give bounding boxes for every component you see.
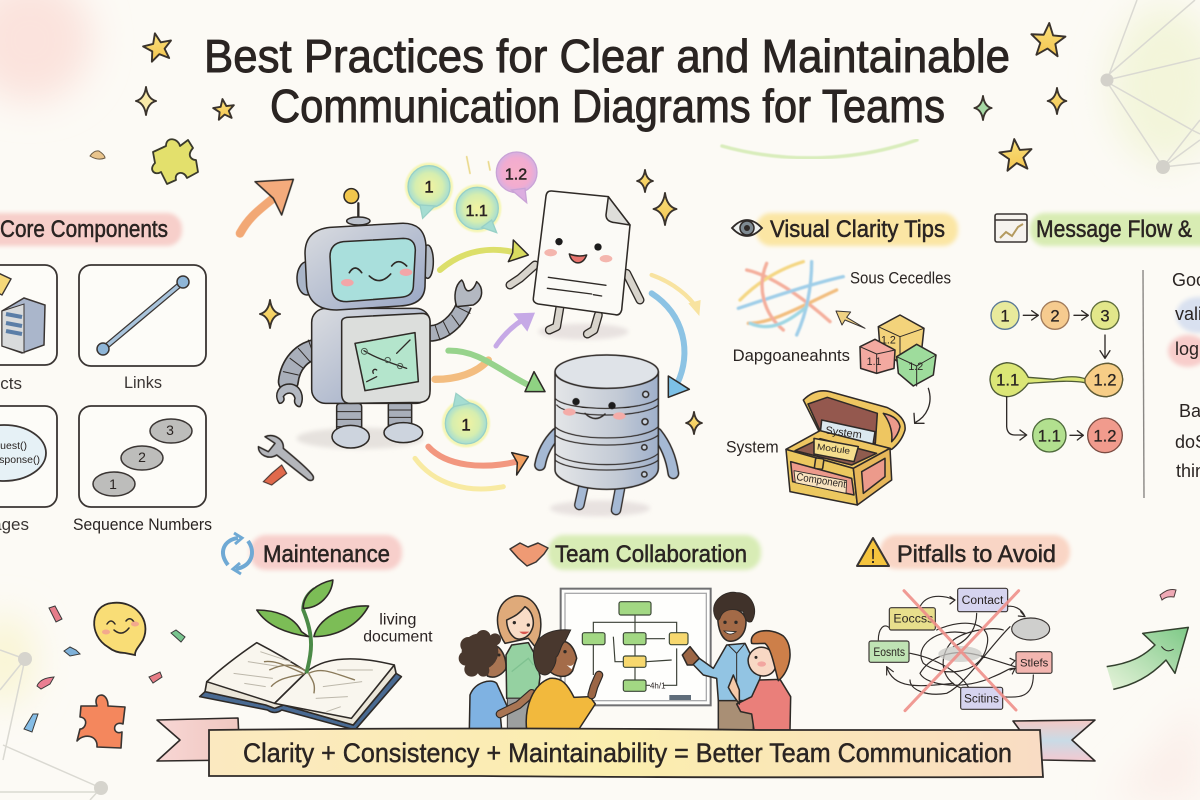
panel: core components cards bbox=[0, 265, 212, 534]
arrow: orange up-right bbox=[240, 179, 293, 233]
banner bbox=[157, 718, 1095, 777]
title: Communication Diagrams for Teams bbox=[270, 80, 945, 132]
central illustration: robot, document and database bbox=[240, 152, 701, 516]
chest card labels: Module bbox=[816, 441, 851, 456]
heading: pitfalls to avoid: Pitfalls to Avoid bbox=[897, 541, 1056, 568]
robot legs bbox=[332, 402, 423, 448]
label: living document: living bbox=[379, 610, 416, 628]
good and bad naming examples bbox=[1168, 270, 1200, 481]
flow node labels: 1.1 bbox=[996, 370, 1019, 389]
icon: warning triangle bbox=[857, 538, 889, 568]
person: middle child in yellow bbox=[526, 630, 599, 730]
chest card labels: Component bbox=[796, 471, 847, 491]
whiteboard bbox=[561, 589, 711, 705]
card: links: Links bbox=[124, 373, 162, 392]
banner ribbon bbox=[209, 728, 1043, 777]
title bbox=[204, 30, 1010, 132]
label: living document: document bbox=[363, 627, 433, 646]
cube numbers: 1.2 bbox=[908, 361, 923, 373]
flow node labels: 2 bbox=[1050, 306, 1060, 325]
decorative stars and sparkles bbox=[136, 22, 1066, 434]
robot right arm bbox=[427, 280, 482, 340]
box labels: Eosnts bbox=[873, 645, 905, 659]
icon: refresh arrows bbox=[223, 533, 252, 574]
heading: pitfalls to avoid bbox=[857, 535, 1070, 569]
heading: maintenance: Maintenance bbox=[263, 541, 390, 568]
robot body bbox=[312, 308, 430, 403]
flow node labels bbox=[996, 306, 1117, 445]
panel: visual clarity illustration bbox=[726, 262, 951, 505]
icon: orange puzzle piece bbox=[77, 695, 125, 748]
treasure chest bbox=[786, 391, 905, 505]
heading: visual clarity tips bbox=[732, 213, 958, 246]
card: sequence numbers: 1 bbox=[109, 476, 117, 492]
flow node labels: 3 bbox=[1100, 306, 1110, 325]
decorative swoosh bbox=[722, 140, 917, 158]
banner right tail bbox=[1013, 720, 1095, 761]
cubes bbox=[860, 315, 936, 386]
cube numbers: 1.1 bbox=[867, 356, 882, 368]
label: scribble: Sous Cecedles bbox=[850, 268, 951, 287]
heading: maintenance bbox=[223, 533, 402, 574]
bubbles: sequence numbers: 1 bbox=[461, 416, 471, 435]
person: left child bbox=[459, 630, 532, 730]
box labels: Stlefs bbox=[1020, 658, 1048, 670]
open book bbox=[200, 643, 401, 730]
sparkle marks near bubbles bbox=[467, 157, 490, 173]
icon: small orange confetti bbox=[90, 151, 105, 159]
confetti: right side bbox=[1160, 590, 1176, 600]
panel divider bbox=[1143, 270, 1144, 498]
arrow: orange under purple bbox=[435, 360, 488, 379]
confetti: left side bbox=[24, 606, 185, 732]
heading: message flow bbox=[995, 213, 1200, 246]
card: messages bbox=[0, 406, 57, 534]
arrow: cubes to scribble bbox=[836, 311, 865, 328]
bubbles: sequence numbers: 1.2 bbox=[505, 166, 527, 183]
icon: smiling speech bubble bbox=[94, 603, 145, 655]
panel: message flow diagram bbox=[990, 301, 1123, 453]
flow node labels: 1.1 bbox=[1038, 426, 1061, 445]
box labels: Scitins bbox=[964, 692, 999, 706]
card: links bbox=[79, 265, 206, 392]
label: system: System bbox=[726, 438, 779, 457]
bubbles: sequence numbers: 1.1 bbox=[466, 203, 488, 220]
card: sequence numbers: Sequence Numbers bbox=[73, 515, 212, 534]
arrow: green to database bbox=[448, 351, 545, 392]
blurred center node bbox=[938, 646, 982, 662]
panel: pitfalls tangled diagram bbox=[869, 588, 1052, 711]
arrow: green up-right smiling bbox=[1107, 627, 1188, 689]
tangled boxes bbox=[869, 588, 1052, 709]
cube numbers bbox=[867, 334, 923, 373]
flow node labels: 1.2 bbox=[1093, 370, 1117, 389]
label: components: Dapgoaneahnts bbox=[733, 346, 850, 365]
panel: team at whiteboard bbox=[459, 589, 791, 730]
red cross bbox=[904, 591, 1019, 711]
chest card labels: System bbox=[825, 424, 863, 441]
card: sequence numbers bbox=[73, 406, 212, 534]
person: man in blue bbox=[682, 592, 761, 730]
flow arrows bbox=[1007, 311, 1110, 440]
cube numbers: 1.2 bbox=[881, 334, 896, 346]
title: Best Practices for Clear and Maintainable bbox=[204, 30, 1010, 82]
heading: core components: Core Components bbox=[0, 216, 168, 243]
arrow: yellow robot to document bbox=[440, 240, 528, 270]
robot left arm bbox=[277, 340, 322, 407]
bubbles: sequence numbers: 1 bbox=[424, 178, 434, 197]
box labels: Contact bbox=[962, 593, 1004, 607]
numbered flow nodes bbox=[990, 301, 1123, 453]
robot bbox=[277, 189, 482, 449]
scribble of colored lines bbox=[738, 262, 843, 335]
arrow: blue document to database bbox=[652, 293, 689, 397]
icon: eye bbox=[732, 220, 762, 236]
arrow: faded yellow bottom bbox=[415, 458, 503, 489]
arrow: purple to document bbox=[496, 313, 535, 346]
person: child in red bbox=[728, 631, 791, 730]
icon: handshake bbox=[510, 543, 548, 566]
plant bbox=[257, 580, 369, 672]
heading: team collaboration: Team Collaboration bbox=[555, 541, 747, 568]
flow node labels: 1.2 bbox=[1093, 426, 1117, 445]
icon: yellow puzzle piece bbox=[152, 139, 198, 184]
robot head bbox=[297, 189, 433, 310]
card: sequence numbers: 3 bbox=[166, 422, 174, 438]
tangled lines bbox=[878, 596, 1033, 697]
database character bbox=[540, 355, 673, 516]
bubbles: sequence numbers bbox=[405, 152, 537, 447]
arrow: cubes to chest bbox=[914, 388, 930, 423]
banner text: Clarity + Consistency + Maintainability = Better Team Communication bbox=[243, 738, 1012, 768]
whiteboard: 4h/1 bbox=[650, 681, 666, 690]
banner left tail bbox=[157, 718, 240, 761]
chest card labels bbox=[796, 424, 863, 491]
box labels bbox=[873, 593, 1048, 706]
person: woman in green bbox=[497, 596, 541, 730]
roots bbox=[264, 661, 355, 693]
heading: team collaboration bbox=[510, 535, 761, 570]
icon: browser window bbox=[995, 214, 1027, 242]
document character bbox=[510, 191, 640, 340]
card: sequence numbers: 2 bbox=[138, 449, 146, 465]
card: objects bbox=[0, 265, 57, 393]
arrow: faded yellow right bbox=[652, 275, 701, 316]
arrow: red-orange robot to database bbox=[428, 447, 528, 475]
panel: maintenance illustration bbox=[200, 580, 433, 730]
icon: wrench bbox=[258, 436, 313, 485]
label: living document bbox=[363, 610, 433, 646]
flow node labels: 1 bbox=[1000, 306, 1010, 325]
box labels: Eoccss bbox=[893, 612, 933, 626]
heading: visual clarity tips: Visual Clarity Tips bbox=[770, 216, 945, 243]
icon: warning triangle: ! bbox=[870, 546, 876, 568]
